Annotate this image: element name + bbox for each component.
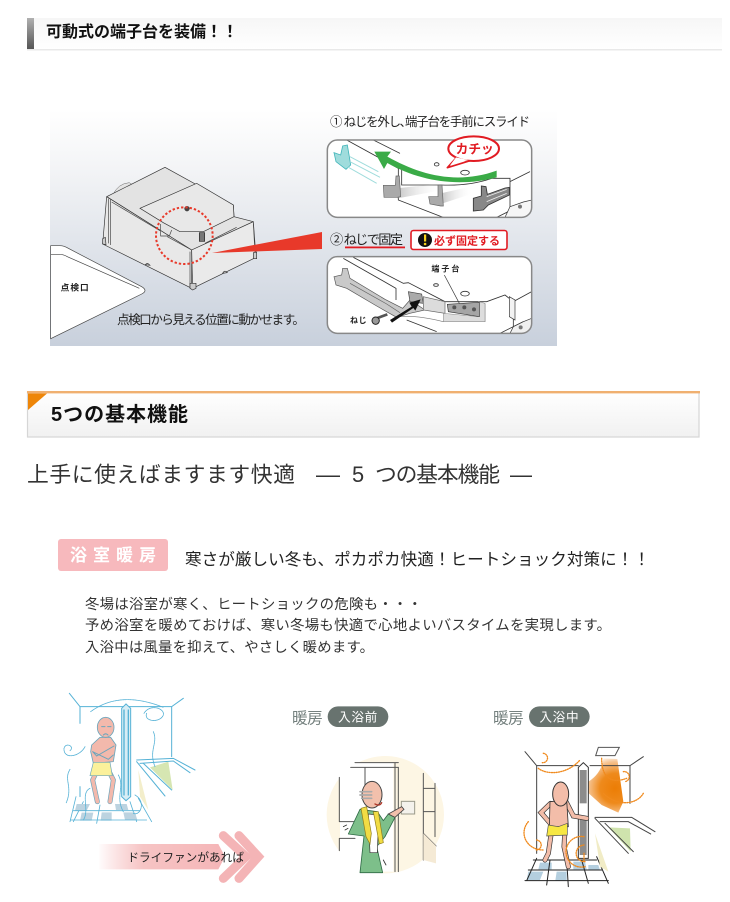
panel: step 2 screw illustration bbox=[327, 257, 532, 333]
label: heating before bath bbox=[292, 706, 388, 727]
lead text: 寒さが厳しい冬も、ポカポカ快適！ヒートショック対策に！！ bbox=[185, 550, 650, 569]
label: heating during bath: 入浴中 bbox=[539, 711, 579, 725]
heading: movable terminal block: 可動式の端子台を装備！！ bbox=[46, 22, 238, 41]
callout: click bbox=[447, 136, 499, 168]
screw bbox=[377, 314, 387, 318]
panel: step 1 slide illustration bbox=[327, 136, 532, 220]
label: bathroom heating bbox=[58, 539, 168, 571]
label: heating during bath bbox=[493, 706, 590, 727]
illustration: man warming during bath with fan bbox=[524, 747, 655, 887]
body text bbox=[85, 596, 611, 656]
illustration: man pressing switch before bath bbox=[327, 756, 444, 873]
red pointer wedge bbox=[212, 232, 322, 253]
illustration: ventilation unit with dotted circle bbox=[103, 167, 257, 290]
step 2 label: ② ねじで固定 bbox=[330, 232, 403, 247]
illustration: inspection opening bbox=[51, 246, 145, 339]
arrow: with a dry fan bbox=[99, 836, 258, 878]
illustration: inspection opening: 点検口 bbox=[61, 282, 89, 293]
heading: movable terminal block bbox=[27, 18, 722, 50]
body text: 入浴中は風量を抑えて、やさしく暖めます。 bbox=[85, 639, 374, 656]
warning badge: must secure: 必ず固定する bbox=[434, 234, 500, 248]
black pointer arrow bbox=[390, 299, 421, 323]
label: heating before bath: 暖房 bbox=[292, 709, 323, 727]
body text: 冬場は浴室が寒く、ヒートショックの危険も・・・ bbox=[85, 596, 422, 613]
caption: inspection opening: 点検口から見える位置に動かせます。 bbox=[117, 313, 305, 327]
panel: step 2 screw illustration: ねじ bbox=[350, 316, 367, 325]
heading: five basic functions bbox=[27, 391, 700, 437]
panel: step 2 screw illustration: 端子台 bbox=[431, 263, 459, 273]
subtitle bbox=[27, 462, 532, 487]
step 1 label: ① ねじを外し､端子台を手前にスライド bbox=[330, 114, 530, 129]
label: heating before bath: 入浴前 bbox=[338, 710, 377, 725]
label: bathroom heating: 浴室暖房 bbox=[70, 546, 156, 565]
illustration: shivering man in cold bathroom bbox=[64, 693, 195, 823]
heading: five basic functions: 5つの基本機能 bbox=[51, 403, 188, 426]
panel: terminal block diagram bbox=[50, 110, 557, 346]
warning badge: must secure bbox=[411, 230, 507, 250]
subtitle: 上手に使えばますます快適 bbox=[27, 462, 295, 487]
green slide arrow bbox=[374, 152, 497, 182]
arrow: with a dry fan: ドライファンがあれば bbox=[127, 850, 244, 864]
subtitle: — bbox=[510, 462, 532, 487]
subtitle: つの基本機能 bbox=[375, 462, 500, 487]
body text: 予め浴室を暖めておけば、寒い冬場も快適で心地よいバスタイムを実現します。 bbox=[85, 617, 611, 634]
subtitle: 5 bbox=[352, 462, 364, 487]
callout: click: カチッ bbox=[456, 141, 494, 156]
subtitle: — bbox=[316, 462, 340, 487]
label: heating during bath: 暖房 bbox=[493, 709, 524, 727]
